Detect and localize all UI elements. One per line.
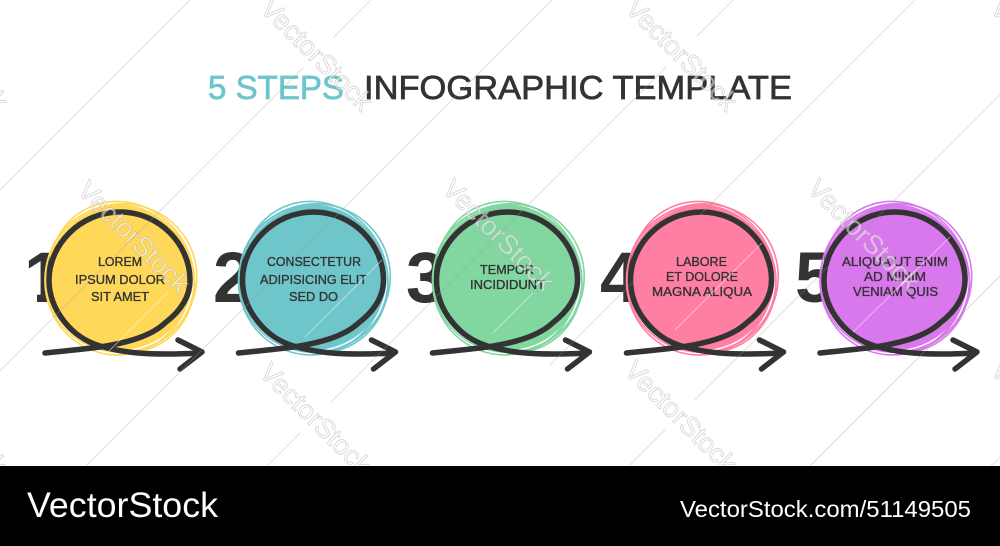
step 5 xyxy=(794,175,997,379)
step 3 xyxy=(406,175,609,379)
step 3 label xyxy=(470,263,545,292)
step 3 label: INCIDIDUNT xyxy=(470,278,545,292)
step 3 number: 3 xyxy=(406,239,446,318)
footer bar: VectorStock xyxy=(27,486,219,525)
title: INFOGRAPHIC TEMPLATE xyxy=(364,69,792,106)
step 1 circle xyxy=(19,175,222,379)
step 4 label xyxy=(652,255,753,299)
step 3 label: TEMPOR xyxy=(480,263,534,277)
step 1 loop arrow xyxy=(45,212,202,369)
step 3 loop arrow xyxy=(432,212,590,369)
step 4 label: LABORE xyxy=(676,255,727,269)
step 5 label xyxy=(842,255,948,299)
step 2 label: SED DO xyxy=(289,290,338,304)
step 5 loop arrow xyxy=(820,212,977,369)
step 2 circle xyxy=(213,175,415,379)
step 2 label: ADIPISICING ELIT xyxy=(260,273,367,287)
title: 5 STEPS xyxy=(208,69,344,106)
step 4 label: ET DOLORE xyxy=(666,270,738,284)
step 1 label xyxy=(75,255,165,304)
watermark: VectorStock xyxy=(802,173,926,297)
footer bar xyxy=(0,466,1000,546)
step 5 label: VENIAM QUIS xyxy=(853,285,938,299)
step 4 xyxy=(600,175,803,379)
step 5 label: ALIQUA UT ENIM xyxy=(842,255,948,269)
step 3 circle xyxy=(407,175,609,379)
step 1 xyxy=(19,175,222,379)
watermark: VectorStock xyxy=(72,175,196,299)
step 2 xyxy=(213,175,415,379)
step 5 label: AD MINIM xyxy=(864,270,926,284)
step 1 label: SIT AMET xyxy=(91,290,149,304)
step 2 label xyxy=(260,255,367,304)
step 4 circle xyxy=(601,175,803,379)
step 2 loop arrow xyxy=(238,212,396,369)
step 4 number: 4 xyxy=(600,239,640,318)
watermark: VectorStock xyxy=(619,355,743,479)
step 1 label: IPSUM DOLOR xyxy=(75,273,165,287)
watermark: VectorStock xyxy=(437,173,561,297)
step 1 number: 1 xyxy=(24,239,64,318)
footer bar: VectorStock.com/51149505 xyxy=(680,496,971,522)
step 2 number: 2 xyxy=(213,239,252,318)
step 5 number: 5 xyxy=(795,239,834,318)
step 4 label: MAGNA ALIQUA xyxy=(652,285,753,299)
step 2 label: CONSECTETUR xyxy=(267,255,361,269)
step 1 label: LOREM xyxy=(98,255,142,269)
step 4 loop arrow xyxy=(626,212,784,369)
step 5 circle xyxy=(794,175,997,379)
watermark: VectorStock xyxy=(254,357,378,481)
